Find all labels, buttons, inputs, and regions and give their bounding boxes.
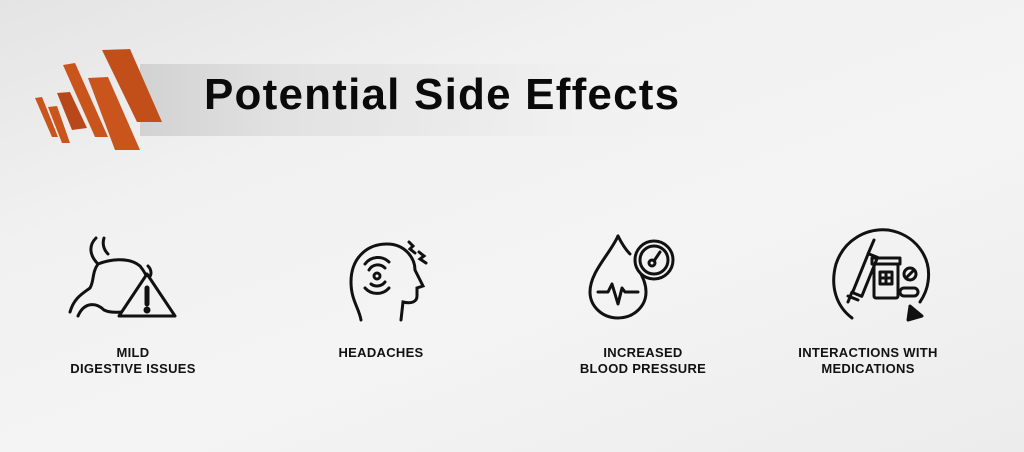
label: medications: INTERACTIONS WITH (798, 345, 938, 360)
title band (140, 64, 720, 136)
label: blood pressure (580, 345, 706, 376)
icon: medication interactions (832, 228, 930, 322)
label: medications: MEDICATIONS (821, 361, 915, 376)
icon: stomach warning (68, 236, 177, 318)
logo bars (35, 49, 162, 150)
title: Potential Side Effects (204, 70, 680, 119)
label: blood pressure: INCREASED (603, 345, 683, 360)
label: digestive: MILD (116, 345, 149, 360)
label: digestive: DIGESTIVE ISSUES (70, 361, 196, 376)
icon: headache (350, 240, 428, 322)
label: headaches: HEADACHES (338, 345, 424, 360)
label: digestive (70, 345, 196, 376)
label: medications (798, 345, 938, 376)
icon: blood pressure (588, 234, 674, 320)
label: blood pressure: BLOOD PRESSURE (580, 361, 706, 376)
